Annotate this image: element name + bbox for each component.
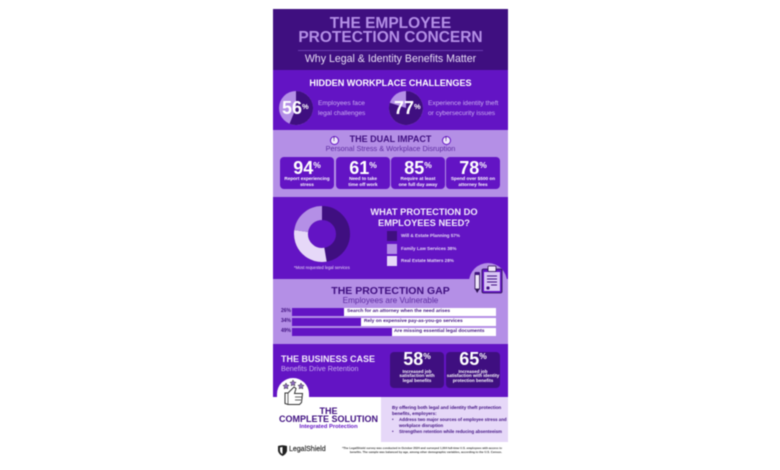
chart footnote: *Most requested legal services bbox=[294, 265, 350, 270]
stat card: 58 percent bbox=[390, 352, 444, 388]
icon: alert right: ! bbox=[445, 136, 447, 142]
title: THE EMPLOYEE bbox=[330, 14, 451, 32]
panel: the business case bbox=[273, 344, 508, 396]
bullet list bbox=[392, 417, 508, 435]
heading bbox=[278, 406, 378, 424]
stat card: 85 percent: one full day away bbox=[399, 182, 437, 187]
icon: thumbs up with stars bbox=[276, 377, 310, 406]
panel: the dual impact bbox=[273, 130, 508, 197]
panel: header bbox=[273, 9, 508, 70]
legend: real estate matters bbox=[386, 255, 454, 267]
icon: clipboard document bbox=[468, 262, 508, 294]
bullet list: Strengthen retention while reducing absenteeism bbox=[399, 429, 502, 434]
stat card: 85 percent: 85% bbox=[404, 158, 432, 178]
bullet list: • bbox=[392, 417, 394, 422]
legend: real estate matters: Real Estate Matters 28% bbox=[401, 258, 454, 263]
bar row: 49 percent: Are missing essential legal documents bbox=[394, 329, 485, 334]
title bbox=[298, 14, 483, 46]
subheading: Benefits Drive Retention bbox=[281, 364, 359, 373]
stat card: 65 percent: 65% bbox=[459, 349, 487, 369]
bar row: 49 percent: 49% bbox=[281, 328, 291, 334]
stat card: 61 percent: 61% bbox=[349, 158, 377, 178]
bar row: 26 percent bbox=[280, 307, 497, 317]
legend: family law services: Family Law Services 38% bbox=[401, 246, 456, 251]
heading: THE BUSINESS CASE bbox=[281, 354, 375, 364]
stat card: 61 percent: Need to take bbox=[349, 176, 377, 181]
logo: LegalShield bbox=[277, 444, 326, 457]
stat card: 78 percent: attorney fees bbox=[458, 182, 488, 187]
bar row: 26 percent: 26% bbox=[281, 308, 291, 314]
subheading: Personal Stress & Workplace Disruption bbox=[326, 144, 455, 153]
stat card: 61 percent bbox=[336, 157, 390, 189]
stat card: 65 percent: protection benefits bbox=[453, 378, 493, 383]
intro text: benefits, employers: bbox=[392, 411, 437, 416]
heading: THE PROTECTION GAP bbox=[331, 284, 450, 296]
stat card: 58 percent: Increased job bbox=[402, 368, 432, 374]
stat: 56 percent: 56% bbox=[282, 98, 309, 118]
bar row: 26 percent: Search for an attorney when the need arises bbox=[347, 309, 450, 314]
panel: hidden workplace challenges bbox=[273, 70, 508, 130]
legend: will and estate planning: Will & Estate Planning 57% bbox=[401, 233, 460, 238]
stat: 77 percent: Experience identity theft bbox=[428, 100, 498, 107]
panel: the complete solution bbox=[278, 406, 378, 430]
heading: COMPLETE SOLUTION bbox=[279, 414, 378, 424]
subtitle: Why Legal & Identity Benefits Matter bbox=[305, 53, 476, 65]
bullet list: workplace disruption bbox=[399, 422, 443, 428]
heading: THE bbox=[320, 406, 338, 416]
stat: 56 percent: Employees face bbox=[318, 100, 365, 107]
heading bbox=[370, 207, 478, 228]
bullet list: • bbox=[392, 429, 394, 434]
title: PROTECTION CONCERN bbox=[298, 29, 483, 46]
stat: 77 percent: or cybersecurity issues bbox=[428, 110, 495, 116]
footnote: *The LegalShield survey was conducted in October 2024 and surveyed 1,004 full-time U.S. employees with access to benefits. The sample was balanced by age, among other demographic variables, according to the U.S. Census. bbox=[342, 446, 502, 454]
stat card: 94 percent: 94% bbox=[293, 158, 321, 178]
intro text: By offering both legal and identity theft protection bbox=[392, 405, 501, 410]
icon: alert left bbox=[330, 136, 338, 144]
heading: HIDDEN WORKPLACE CHALLENGES bbox=[309, 78, 472, 88]
stat card: 65 percent: satisfaction with identity bbox=[447, 373, 499, 378]
stat card: 94 percent bbox=[280, 157, 334, 189]
stat: 56 percent bbox=[278, 90, 366, 126]
stat card: 65 percent: Increased job bbox=[458, 368, 488, 374]
stat: 77 percent bbox=[388, 90, 499, 126]
logo: LegalShield: LegalShield bbox=[289, 446, 326, 453]
stat card: 58 percent: 58% bbox=[403, 349, 431, 369]
stat card: 78 percent: Spend over $500 on bbox=[451, 176, 495, 181]
donut chart bbox=[293, 205, 350, 263]
stat card: 61 percent: time off work bbox=[348, 182, 378, 187]
heading: THE DUAL IMPACT bbox=[350, 134, 431, 144]
bar row: 34 percent bbox=[280, 317, 497, 327]
heading: EMPLOYEES NEED? bbox=[378, 218, 470, 228]
panel: what protection do employees need bbox=[273, 197, 508, 279]
bullet list: Address two major sources of employee stress and bbox=[399, 417, 507, 422]
stat: 77 percent: 77% bbox=[394, 98, 421, 118]
legend: family law services bbox=[386, 243, 457, 255]
legend: will and estate planning bbox=[386, 230, 460, 242]
panel: solution text bbox=[381, 396, 508, 442]
stat card: 58 percent: satisfaction with bbox=[399, 373, 435, 378]
stat card: 65 percent bbox=[446, 352, 500, 388]
stat card: 58 percent: legal benefits bbox=[403, 378, 431, 383]
panel: the protection gap bbox=[273, 279, 508, 344]
icon: alert left: ! bbox=[333, 136, 335, 142]
bar row: 49 percent bbox=[280, 327, 497, 337]
stat card: 94 percent: stress bbox=[300, 182, 314, 187]
stat card: 94 percent: Report experiencing bbox=[284, 176, 330, 181]
stat card: 85 percent: Require at least bbox=[401, 176, 435, 181]
stat: 56 percent: legal challenges bbox=[318, 110, 365, 116]
icon: alert right bbox=[442, 136, 450, 144]
stat card: 78 percent bbox=[446, 157, 500, 189]
subheading: Integrated Protection bbox=[299, 424, 358, 430]
intro text bbox=[392, 404, 502, 417]
stat card: 85 percent bbox=[391, 157, 445, 189]
subheading: Employees are Vulnerable bbox=[343, 296, 438, 305]
bar row: 34 percent: Rely on expensive pay-as-you-go services bbox=[364, 319, 463, 324]
bar row: 34 percent: 34% bbox=[281, 318, 291, 324]
heading: WHAT PROTECTION DO bbox=[370, 207, 478, 217]
stat card: 78 percent: 78% bbox=[459, 158, 487, 178]
